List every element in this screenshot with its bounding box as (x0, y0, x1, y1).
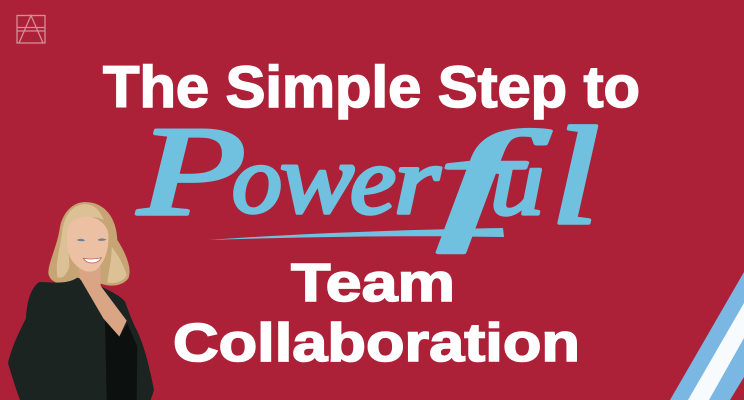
script word: Powerful (137, 99, 600, 254)
script word: Powerful: e (350, 127, 396, 234)
underline swoosh (209, 228, 504, 240)
script word: Powerful: f (436, 105, 550, 253)
script word: Powerful: o (232, 126, 282, 233)
face (67, 217, 108, 272)
smile (83, 258, 101, 263)
icon: logo mark (17, 16, 45, 43)
title: first line: The Simple Step to (103, 55, 640, 120)
hair (48, 202, 130, 286)
script word: Powerful: w (280, 123, 354, 234)
hair highlight (57, 204, 127, 283)
neck (79, 265, 101, 286)
title: Collaboration: Collaboration (173, 313, 580, 373)
blazer (8, 278, 154, 400)
script word: Powerful: r (394, 127, 441, 234)
script word: Powerful: u (490, 128, 544, 235)
eyes (77, 238, 107, 241)
script word: Powerful: l (550, 99, 600, 254)
stripe: outer blue (670, 272, 744, 400)
decorative corner stripes (670, 272, 744, 400)
chest (80, 278, 127, 337)
title: Team: Team (291, 253, 455, 313)
stripe: white (688, 303, 744, 400)
lace top (105, 321, 137, 400)
script word: Powerful: P (137, 100, 246, 242)
portrait: woman in black blazer (8, 202, 154, 400)
